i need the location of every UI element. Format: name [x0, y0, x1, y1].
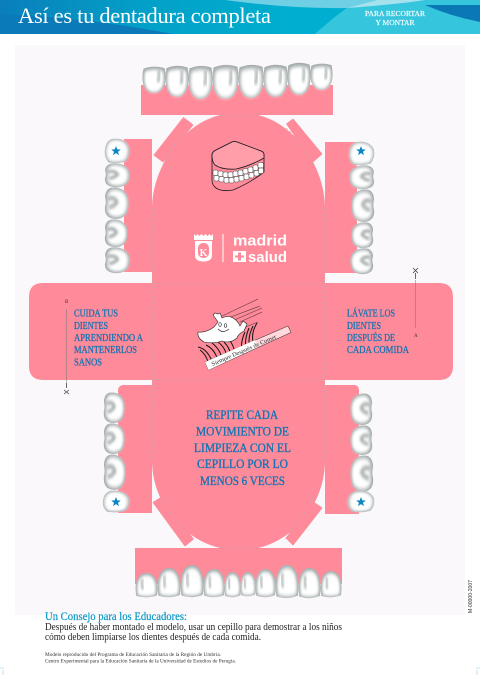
upper left teeth — [105, 139, 130, 273]
text: centre message — [194, 407, 291, 488]
text: credits — [45, 652, 237, 664]
subtitle: para recortar y montar — [365, 9, 425, 27]
text: credits: Centro Experimental para la Educación Sanitaria de la Universidad de Estudios de Perugia. — [45, 658, 237, 664]
text: left flap: MANTENERLOS — [74, 345, 137, 356]
icon: city shield: K — [200, 248, 208, 259]
text: right flap: CADA COMIDA — [347, 345, 410, 356]
text: left flap: SANOS — [74, 358, 102, 369]
text: centre message: LIMPIEZA CON EL — [194, 440, 291, 455]
lower left teeth — [103, 392, 129, 512]
cut guide A: A — [414, 334, 418, 339]
top teeth row — [142, 63, 333, 99]
mascot: running tooth with brush banner — [198, 299, 291, 370]
text: advice for educators: Un Consejo para los Educadores: — [45, 611, 187, 623]
side band with rounded ends — [29, 283, 453, 380]
icon: star — [111, 146, 121, 155]
tabs around the palate — [154, 118, 322, 546]
top gum strip — [141, 85, 333, 115]
bottom teeth row — [136, 565, 342, 598]
text: centre message: CEPILLO POR LO — [197, 456, 288, 471]
icon: star — [356, 146, 366, 155]
text: advice for educators — [45, 611, 342, 643]
subtitle: para recortar y montar: PARA RECORTAR — [365, 9, 425, 18]
face — [218, 322, 229, 332]
text: centre message: REPITE CADA — [206, 407, 279, 422]
icon: denture illustration — [212, 142, 264, 191]
denture teeth — [213, 162, 264, 183]
bristles — [198, 323, 257, 366]
text: left flap: DIENTES — [74, 321, 108, 332]
icon: star — [356, 497, 366, 506]
text: credits: Modelo reproducido del Programa de Educación Sanitaria de la Región de Umbria. — [45, 652, 222, 658]
text: right flap: DESPUÉS DE — [347, 332, 395, 344]
cut guide B — [64, 300, 69, 394]
fold lines — [152, 116, 325, 548]
speed lines — [222, 299, 262, 328]
text: right flap: LÁVATE LOS — [347, 308, 395, 320]
lower right teeth — [348, 394, 374, 512]
text: advice for educators: cómo deben limpiarse los dientes después de cada comida. — [45, 632, 261, 643]
panel: cut-out sheet background — [15, 45, 465, 615]
text: left flap — [74, 309, 144, 369]
text: right flap: DIENTES — [347, 321, 381, 332]
upper right teeth — [349, 142, 374, 274]
text: centre message: MOVIMIENTO DE — [196, 424, 289, 439]
tooth body — [198, 313, 247, 343]
text: right flap — [347, 308, 410, 356]
logo: madrid salud: salud — [248, 249, 287, 266]
title: Así es tu dentadura completa — [18, 3, 271, 28]
banner: Siempre Después de Comer — [211, 334, 277, 368]
text: left flap: APRENDIENDO A — [74, 333, 144, 344]
subtitle: para recortar y montar: Y MONTAR — [376, 18, 414, 27]
logo: madrid salud: madrid — [233, 234, 287, 250]
upper side flaps — [124, 139, 357, 273]
bottom gum strip — [135, 548, 342, 584]
text: left flap: CUIDA TUS — [74, 309, 118, 320]
text: print code: M-00000-2007 — [468, 580, 474, 613]
central palate — [152, 115, 325, 548]
cut guide B: B — [65, 300, 69, 305]
icon: star — [111, 497, 121, 506]
logo: madrid salud — [194, 234, 287, 266]
text: centre message: MENOS 6 VECES — [200, 473, 285, 488]
text: advice for educators: Después de haber montado el modelo, usar un cepillo para demostrar a los niños — [45, 622, 342, 633]
icon: plus square — [233, 251, 246, 262]
header banner — [0, 0, 480, 34]
cut guide A — [413, 268, 418, 339]
panel: pink denture cut-out — [29, 85, 453, 584]
lower side flaps — [118, 385, 359, 514]
